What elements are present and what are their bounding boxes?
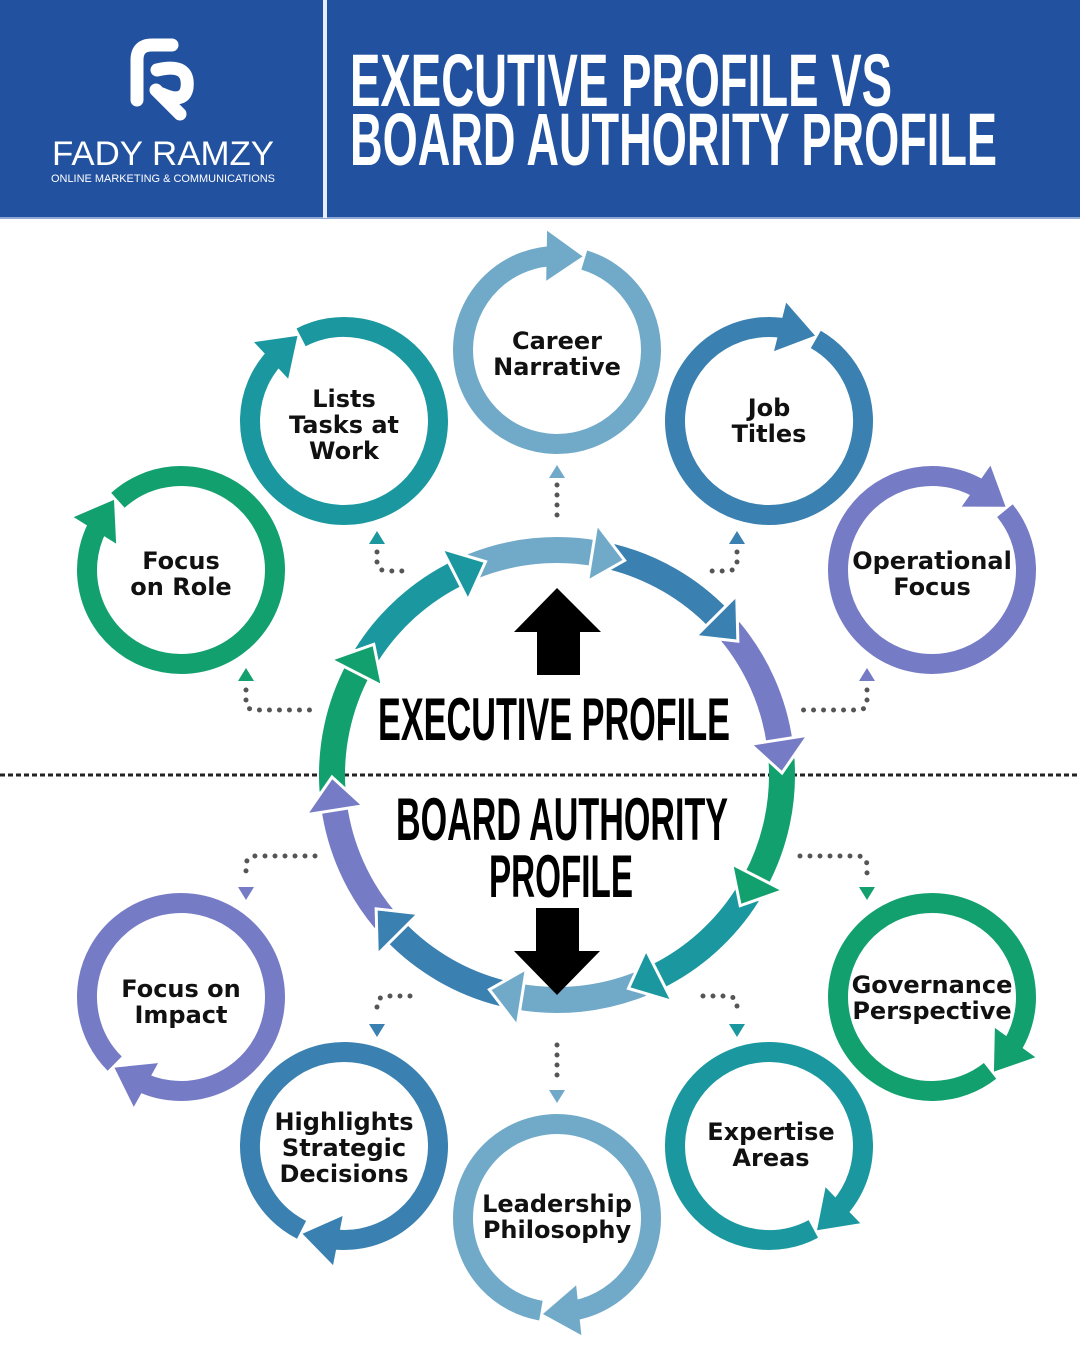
circle: career narrative	[461, 229, 653, 446]
circle: lists tasks at work: Tasks at	[289, 411, 399, 439]
logo	[51, 45, 275, 185]
center text: board authority profile	[396, 786, 728, 910]
circle: job titles: Titles	[732, 420, 806, 448]
header	[0, 0, 1080, 219]
circle: leadership philosophy	[454, 1115, 663, 1346]
circle: career narrative: Narrative	[493, 353, 621, 381]
circle: governance perspective: Governance	[852, 971, 1012, 999]
circle: expertise areas: Expertise	[707, 1118, 835, 1146]
circle: governance perspective: Perspective	[852, 997, 1012, 1025]
circle: career narrative: Career	[512, 327, 602, 355]
circle: governance perspective	[801, 866, 1080, 1143]
circle: expertise areas: Areas	[732, 1144, 810, 1172]
circle: lists tasks at work	[194, 270, 477, 554]
circle: focus on role	[30, 427, 311, 700]
center text: board authority profile: PROFILE	[489, 843, 633, 910]
circle: highlights strategic decisions	[229, 1036, 454, 1281]
circle: highlights strategic decisions: Decisions	[279, 1160, 409, 1188]
circle: focus on impact: Focus on	[121, 975, 241, 1003]
circle: focus on role: on Role	[130, 573, 232, 601]
logo: ONLINE MARKETING & COMMUNICATIONS	[51, 173, 275, 185]
circle: operational focus	[801, 419, 1077, 701]
circle: focus on impact: Impact	[134, 1001, 228, 1029]
divider	[0, 774, 1080, 776]
logo: FADY RAMZY	[52, 135, 274, 173]
circle: focus on impact	[41, 869, 309, 1147]
circle: lists tasks at work: Lists	[312, 385, 376, 413]
center text: executive profile: EXECUTIVE PROFILE	[378, 686, 730, 753]
circle: highlights strategic decisions: Highlights	[274, 1108, 414, 1136]
circle: job titles	[655, 283, 889, 535]
center text: board authority profile: BOARD AUTHORITY	[396, 786, 728, 853]
circle: focus on role: Focus	[142, 547, 220, 575]
central ring	[292, 518, 822, 1032]
icon: up arrow	[514, 588, 601, 675]
circle: operational focus: Focus	[893, 573, 971, 601]
circle: lists tasks at work: Work	[309, 437, 380, 465]
circle: expertise areas	[636, 1013, 919, 1297]
circle: highlights strategic decisions: Strategic	[282, 1134, 406, 1162]
circle: leadership philosophy: Leadership	[482, 1190, 632, 1218]
icon: down arrow	[514, 908, 600, 995]
circle: operational focus: Operational	[852, 547, 1012, 575]
title	[350, 39, 997, 181]
connectors	[246, 485, 867, 1080]
circle: job titles: Job	[746, 394, 790, 422]
circle: leadership philosophy: Philosophy	[483, 1216, 632, 1244]
